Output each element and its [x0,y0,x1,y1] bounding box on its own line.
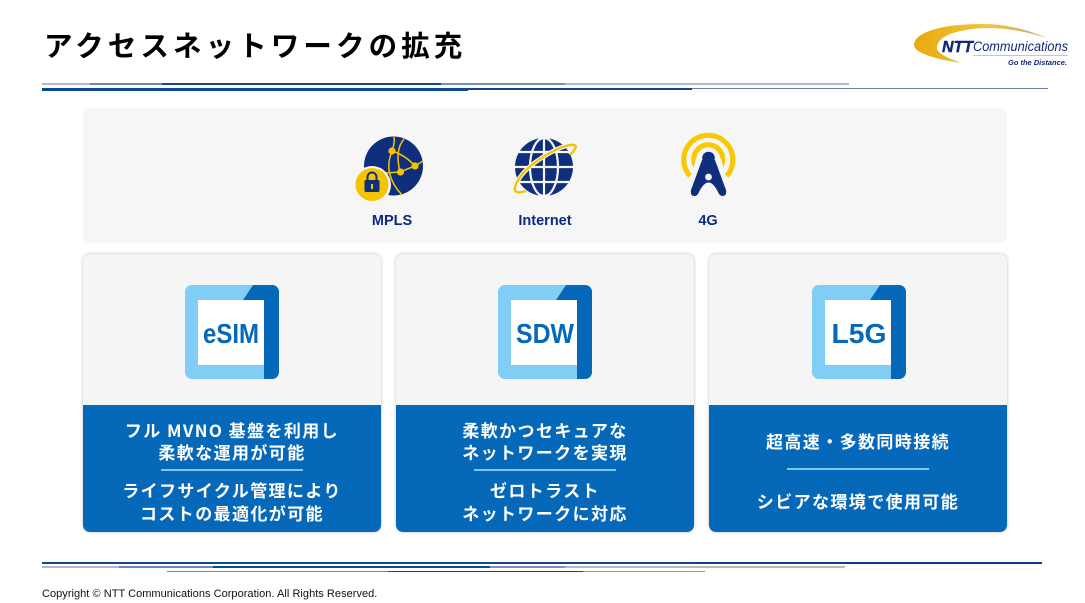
icon: MPLS globe with lock [356,136,424,201]
label: 4G: 4G [698,213,718,229]
text block: SDW description [396,405,694,532]
text block: SDW description: ネットワークを実現 [462,439,628,464]
text block: eSIM description: フル MVNO 基盤を利用し [125,417,339,442]
text block: SDW description: 柔軟かつセキュアな [462,417,628,442]
logo: NTT Communications: Go the Distance. [1008,60,1067,67]
text block: eSIM description: ライフサイクル管理により [122,477,342,502]
card: L5G [709,254,1007,532]
text block: eSIM description [83,405,381,532]
label: MPLS: MPLS [372,213,412,229]
copyright footer: Copyright © NTT Communications Corporation. All Rights Reserved. [42,588,377,600]
icon: L5G chip [812,285,906,379]
label: Internet: Internet [518,213,572,229]
text block: eSIM description: 柔軟な運用が可能 [158,439,306,464]
text block: L5G description: 超高速・多数同時接続 [766,428,950,453]
icon: eSIM chip: eSIM [203,318,259,349]
text block: SDW description: ネットワークに対応 [462,500,628,525]
text block: L5G description: シビアな環境で使用可能 [757,488,959,513]
logo: NTT Communications: Communications [973,39,1068,54]
card: eSIM [83,254,381,532]
icon: eSIM chip [185,285,279,379]
card: SDW [396,254,694,532]
logo: NTT Communications [914,24,1068,67]
title: アクセスネットワークの拡充 [44,24,466,65]
icon: Internet globe [514,138,577,196]
icon: 4G antenna [681,132,736,196]
text block: L5G description [709,405,1007,532]
icon: SDW chip: SDW [516,318,575,349]
icon: L5G chip: L5G [832,318,886,349]
text block: SDW description: ゼロトラスト [490,477,600,502]
icon: SDW chip [498,285,592,379]
logo: NTT Communications: NTT [942,39,974,56]
panel: existing networks [83,108,1007,243]
text block: eSIM description: コストの最適化が可能 [140,500,324,525]
